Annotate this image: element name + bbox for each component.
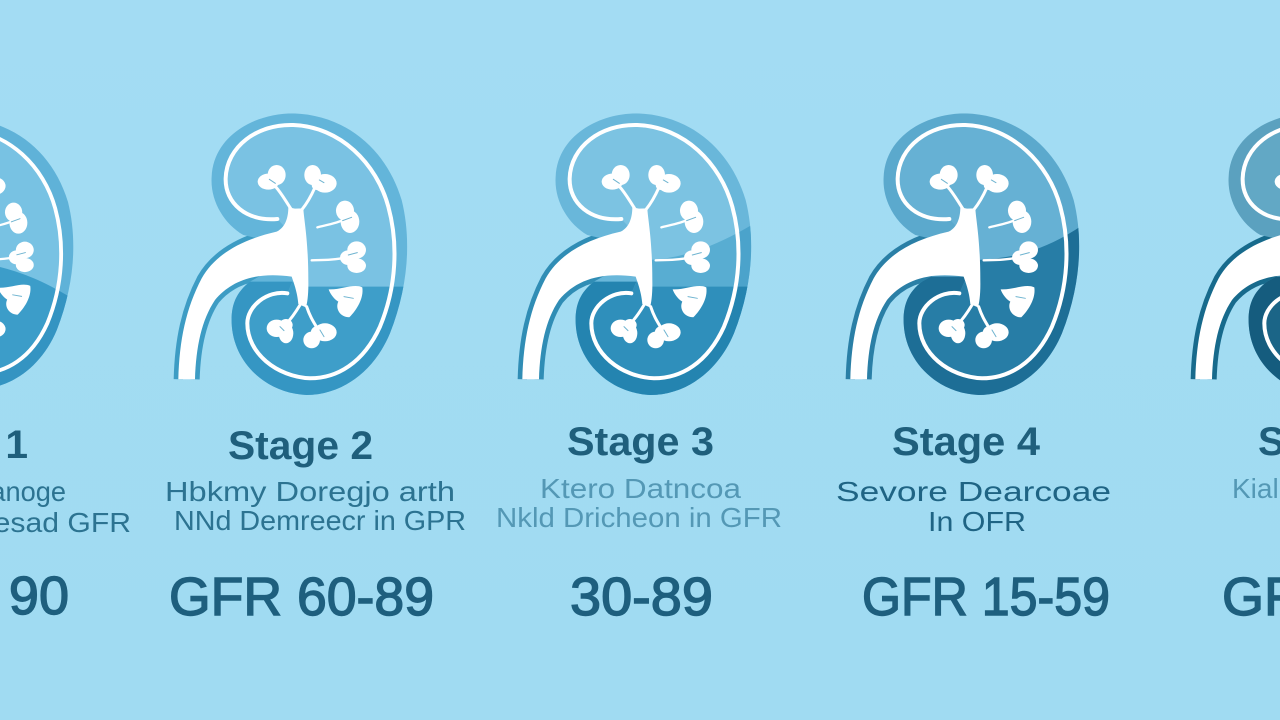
text: stage 3 labels [496, 420, 782, 627]
text: stage 2 labels: Stage 2 [228, 424, 373, 468]
text: stage 2 labels: NNd Demreecr in GPR [174, 505, 466, 536]
text: stage 3 labels: Nkld Dricheon in GFR [496, 502, 782, 533]
text: stage 3 labels: Stage 3 [567, 420, 714, 464]
text: stage 1 labels [0, 423, 131, 626]
icon: kidney stage 2 [174, 114, 408, 395]
icon: kidney stage 3 [518, 114, 752, 395]
text: stage 4 labels: In OFR [928, 506, 1026, 537]
text: stage 4 labels: GFR 15-59 [862, 567, 1110, 627]
text: stage 4 labels: Sevore Dearcoae [836, 476, 1111, 507]
icon: kidney stage 4 [846, 114, 1080, 395]
icon: kidney stage 5 [1190, 118, 1280, 380]
text: stage 5 labels [1222, 420, 1280, 627]
text: stage 4 labels: Stage 4 [892, 420, 1041, 464]
icon: kidney stage 1 [0, 126, 74, 386]
text: stage 4 labels [836, 420, 1111, 627]
text: stage 2 labels [165, 424, 466, 627]
text: stage 3 labels: Ktero Datncoa [540, 473, 741, 504]
text: stage 3 labels: 30-89 [570, 567, 713, 627]
text: stage 2 labels: GFR 60-89 [169, 567, 434, 627]
text: stage 2 labels: Hbkmy Doregjo arth [165, 476, 455, 507]
